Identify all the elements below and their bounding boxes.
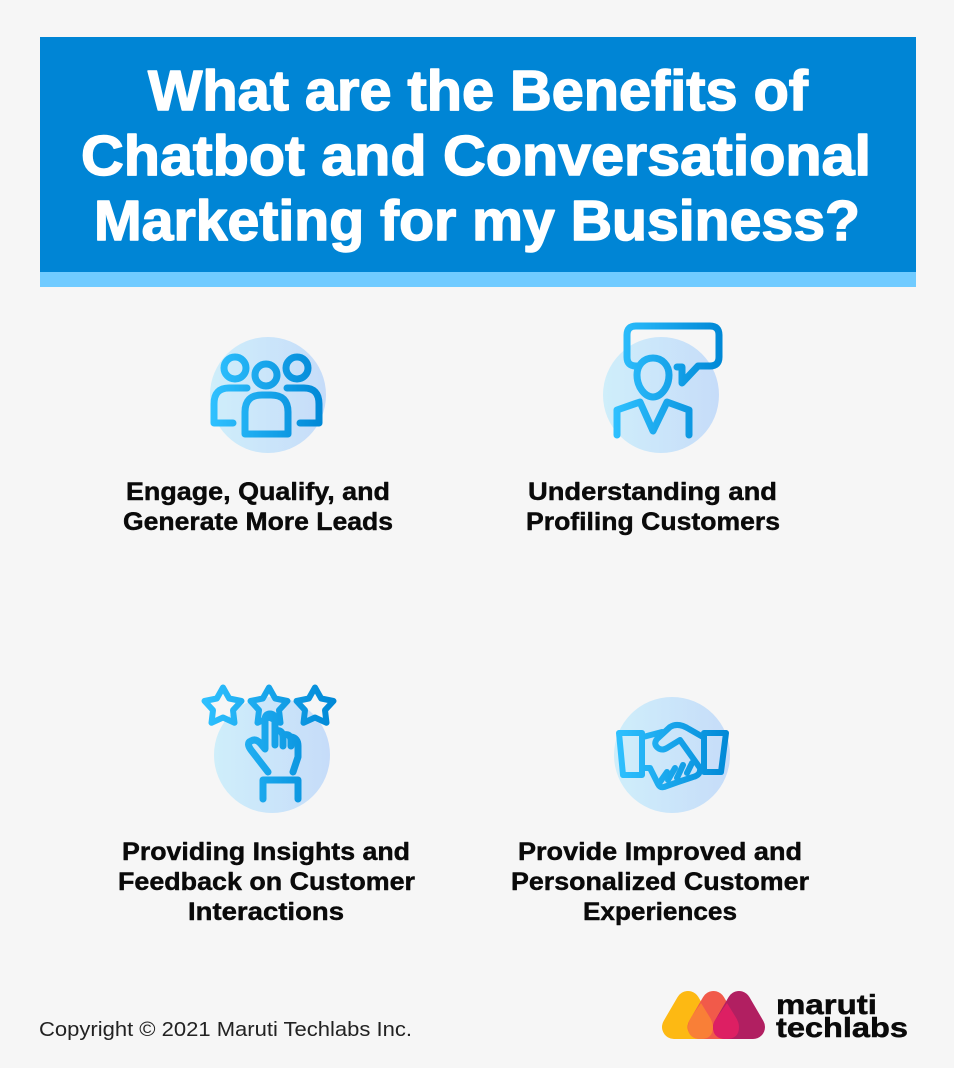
logo: maruti techlabs	[674, 989, 908, 1043]
heading: personalized experiences: Experiences	[583, 898, 737, 926]
header light blue strip	[40, 272, 916, 287]
logo mark	[674, 1003, 753, 1039]
logo wordmark: maruti	[776, 989, 877, 1020]
heading: engage: Engage, Qualify, and	[126, 478, 390, 506]
icon: person with speech bubble	[603, 326, 719, 453]
heading: insights: Interactions	[188, 898, 344, 926]
heading: understanding: Profiling Customers	[526, 508, 780, 536]
heading: engage	[123, 478, 393, 536]
heading: insights	[118, 838, 415, 926]
heading: understanding: Understanding and	[528, 478, 777, 506]
icon: hand tapping star rating	[204, 688, 334, 813]
copyright text: Copyright © 2021 Maruti Techlabs Inc.	[39, 1019, 412, 1041]
heading: insights: Providing Insights and	[122, 838, 410, 866]
icon: handshake	[614, 697, 730, 813]
panel: engage, qualify and generate leads	[123, 337, 393, 536]
header blue panel	[40, 37, 916, 272]
heading: insights: Feedback on Customer	[118, 868, 415, 896]
title	[81, 59, 871, 253]
heading: personalized experiences: Personalized Customer	[511, 868, 809, 896]
title: Chatbot and Conversational	[81, 124, 871, 188]
logo wordmark: techlabs	[776, 1012, 908, 1043]
header banner	[40, 37, 916, 287]
panel: providing insights and feedback	[118, 688, 415, 926]
heading: personalized experiences	[511, 838, 809, 926]
panel: understanding and profiling customers	[526, 326, 780, 536]
heading: personalized experiences: Provide Improved and	[518, 838, 802, 866]
heading: engage: Generate More Leads	[123, 508, 393, 536]
title: What are the Benefits of	[148, 59, 809, 123]
logo wordmark	[776, 989, 908, 1043]
icon: three people	[210, 337, 326, 453]
title: Marketing for my Business?	[94, 189, 860, 253]
panel: improved personalized experiences	[511, 697, 809, 926]
heading: understanding	[526, 478, 780, 536]
